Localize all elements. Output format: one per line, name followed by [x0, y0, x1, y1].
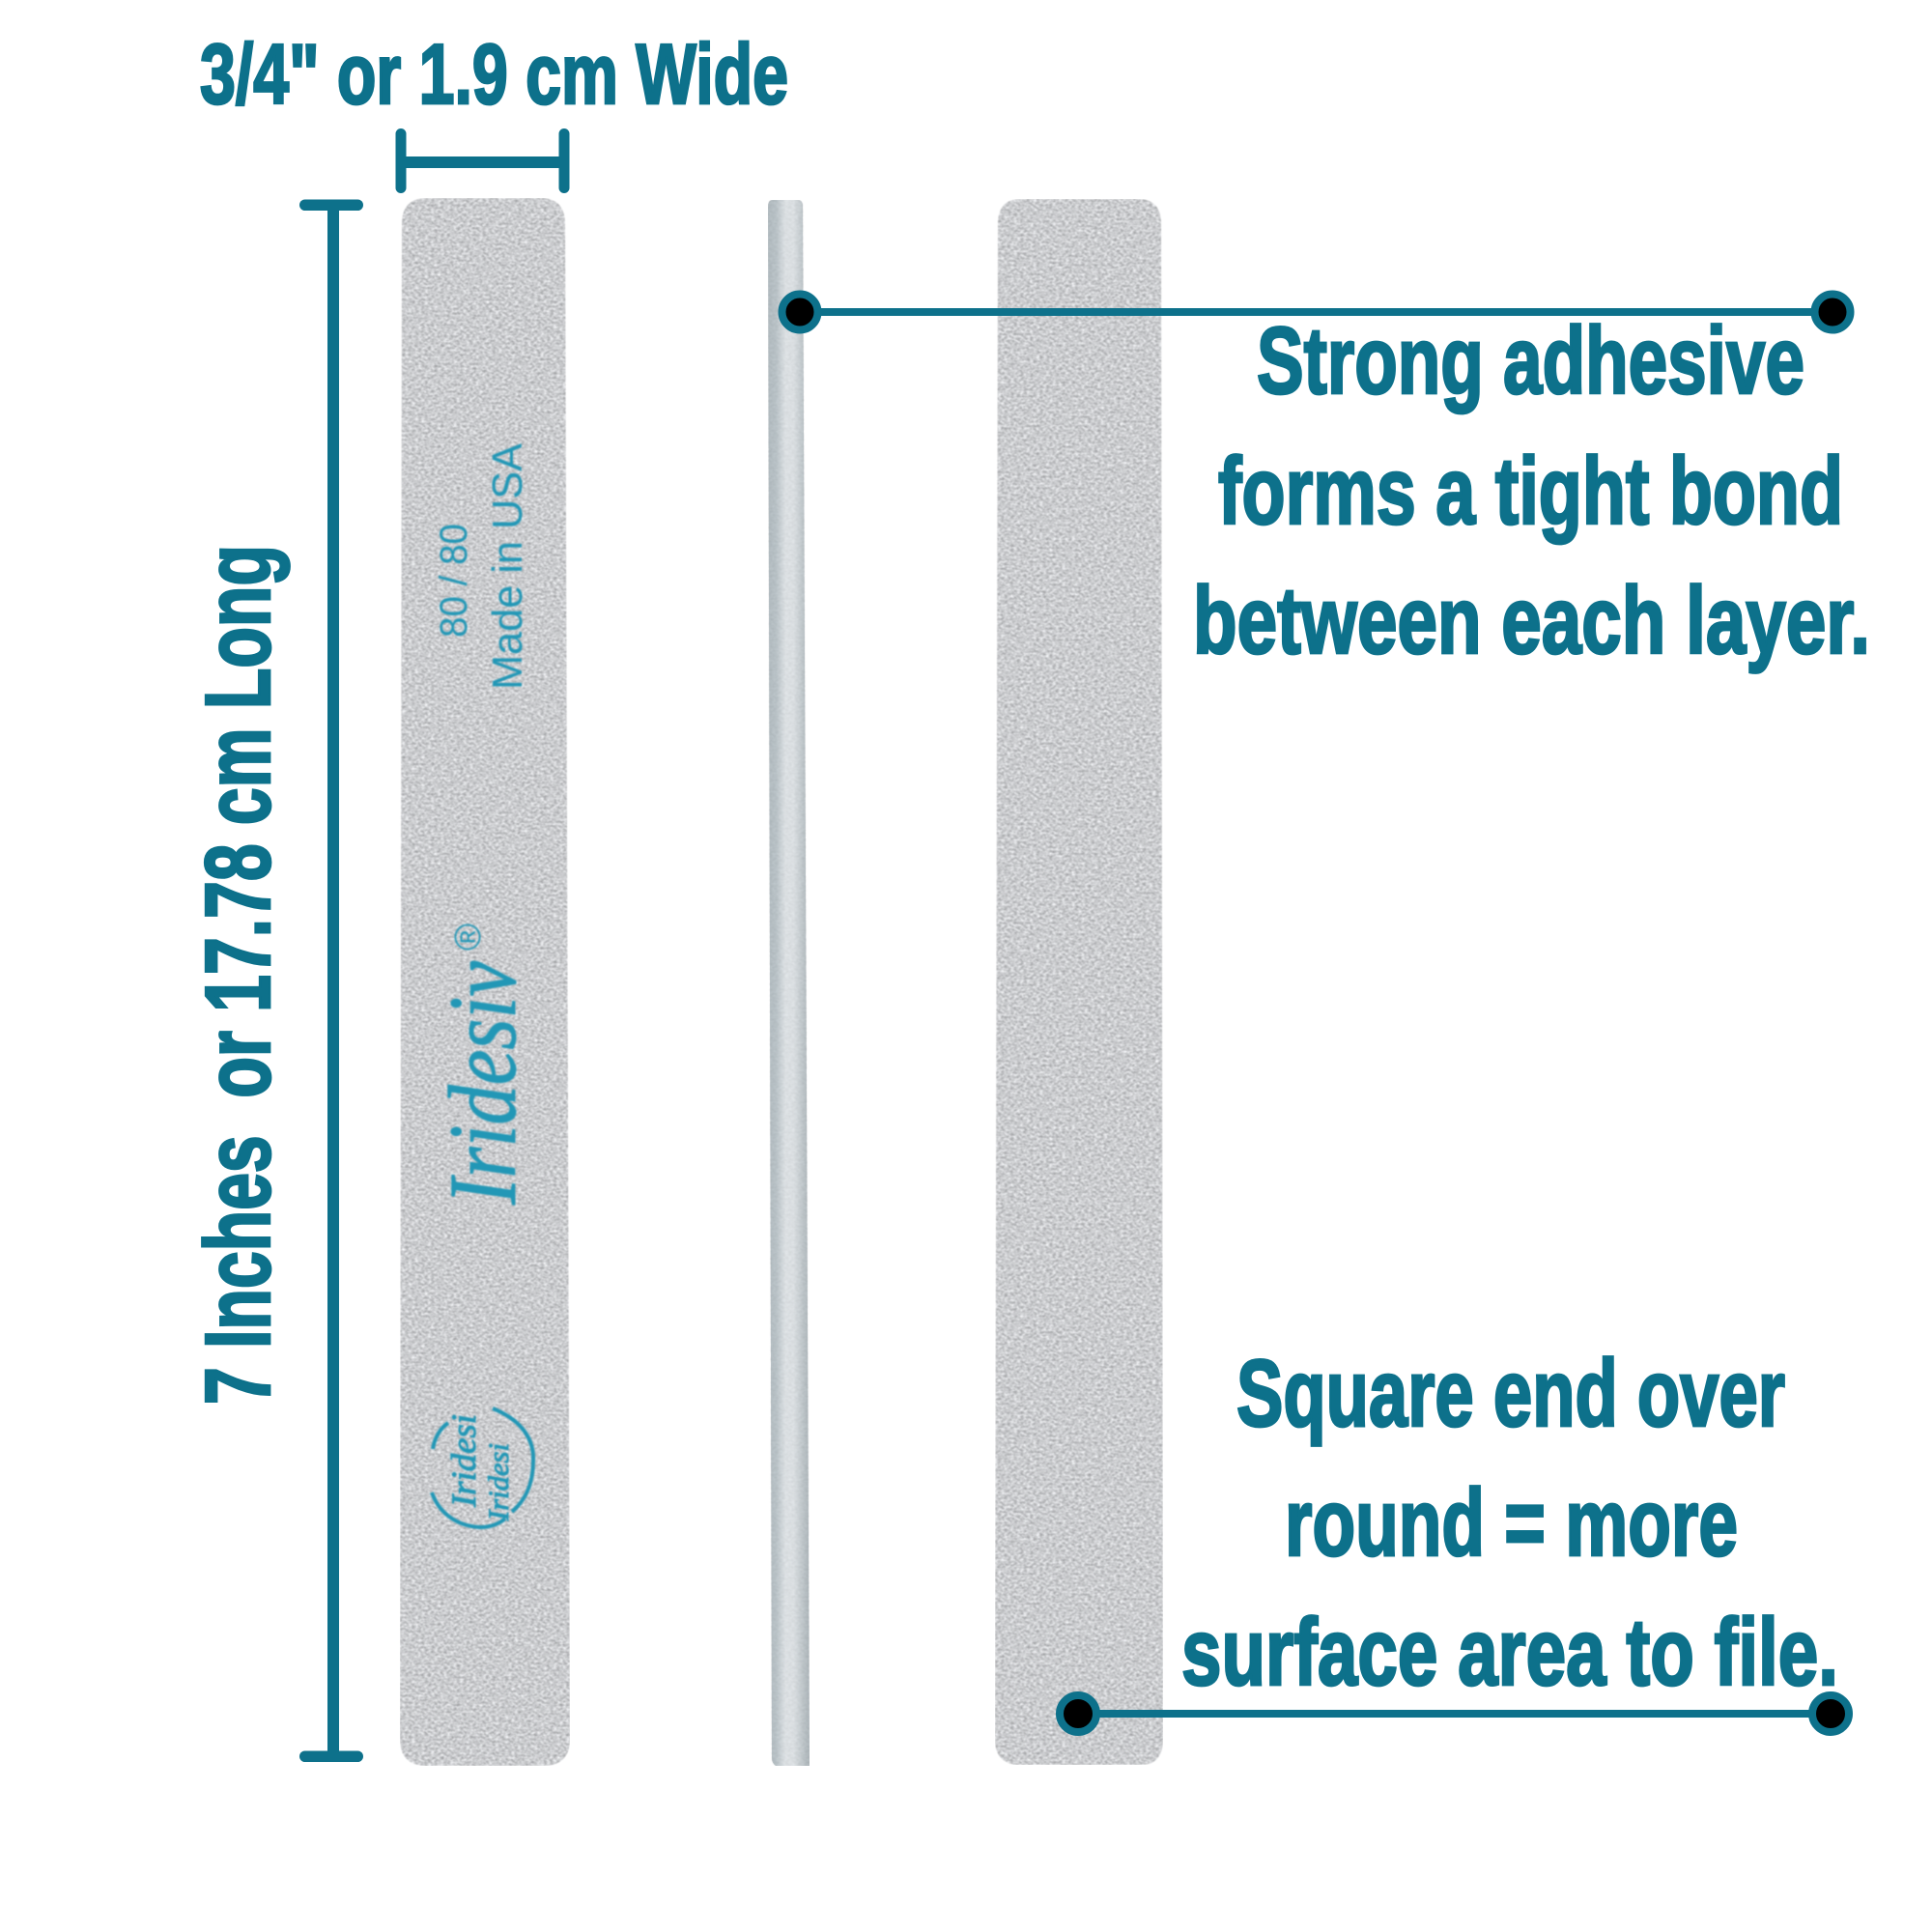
leader end dot: [1814, 294, 1851, 330]
side grit layer: [768, 200, 810, 1766]
registered mark: ®: [448, 923, 489, 951]
side shading: [768, 200, 810, 1766]
leader end dot: [1812, 1695, 1849, 1732]
callout: adhesive leader: [782, 294, 1851, 330]
file front body: [400, 198, 570, 1766]
brand wordmark: Iridesiv: [429, 960, 536, 1206]
leader start dot: [1060, 1695, 1096, 1732]
callout text: square end: [1181, 1340, 1838, 1705]
width bracket: [396, 128, 570, 193]
callout: square end leader: [1060, 1695, 1849, 1732]
length bracket: [299, 199, 363, 1762]
length label: 7 Inches or 17.78 cm Long: [186, 545, 290, 1405]
width heading: 3/4" or 1.9 cm Wide: [200, 26, 788, 122]
panel: nail file back: [995, 199, 1163, 1765]
brand seal: [432, 1408, 533, 1527]
callout text: square end: round = more: [1285, 1469, 1738, 1576]
brand seal: Iridesi: [483, 1443, 515, 1521]
brand seal: Iridesi: [444, 1414, 483, 1508]
callout text: adhesive: [1193, 307, 1870, 673]
origin print: Made in USA: [484, 442, 531, 690]
panel: nail file side profile: [768, 200, 810, 1766]
panel: nail file front with printing: [400, 198, 570, 1766]
grit print: 80 / 80: [433, 524, 475, 638]
leader start dot: [782, 294, 817, 330]
